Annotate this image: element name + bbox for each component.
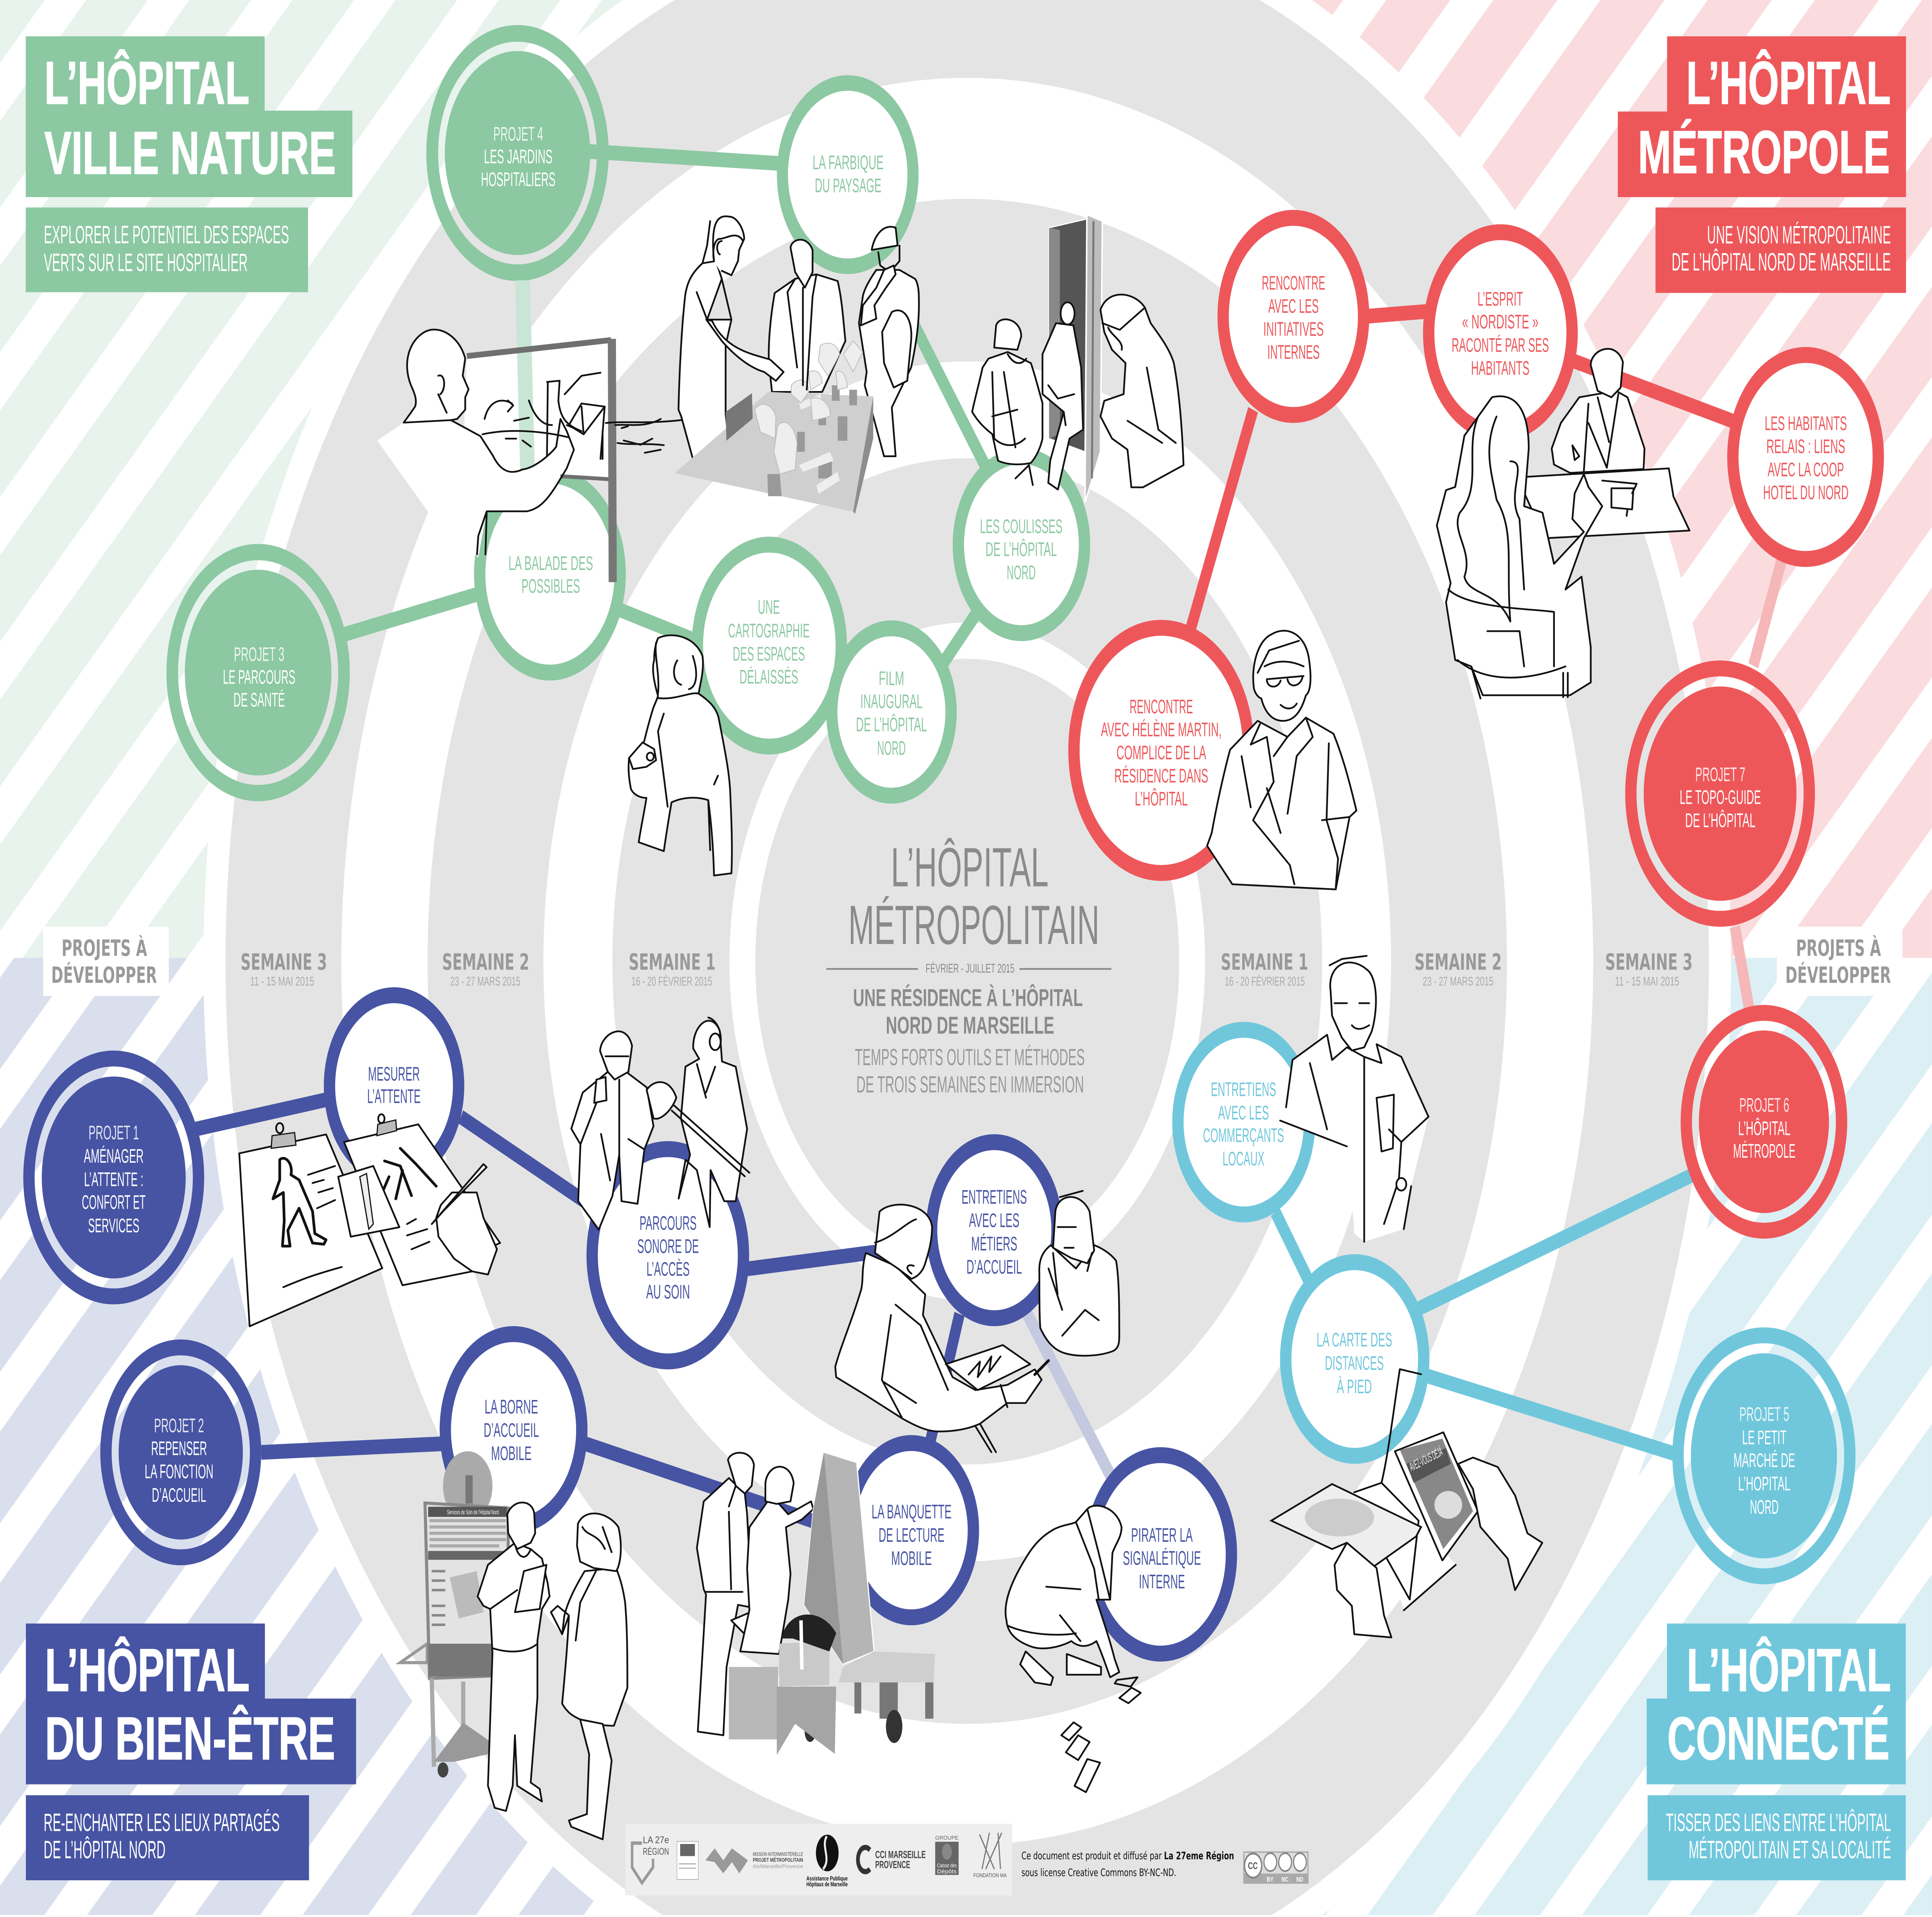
label: entretiens avec les metiers: ENTRETIENS [962, 1186, 1027, 1208]
project 1 circle: AMÉNAGER [84, 1145, 144, 1167]
project 3 circle: LE PARCOURS [223, 667, 295, 688]
project 3 circle: PROJET 3 [234, 644, 284, 665]
event: les habitants relais: HOTEL DU NORD [1763, 482, 1849, 503]
central title block: UNE RÉSIDENCE À L’HÔPITAL [853, 984, 1083, 1012]
event: la farbique du paysage: LA FARBIQUE [813, 152, 884, 174]
project 6 circle: L’HÔPITAL [1738, 1117, 1791, 1140]
event: rencontre initiatives internes: INITIATIVES [1263, 318, 1324, 340]
event: rencontre initiatives internes: RENCONTRE [1262, 272, 1325, 294]
label: projets a developper right: PROJETS À [1796, 935, 1881, 961]
event: rencontre avec helene martin: RENCONTRE [1129, 696, 1193, 718]
event: la banquette circle [849, 1443, 973, 1617]
creative commons badge [1243, 1851, 1308, 1884]
week labels: SEMAINE 2 [442, 949, 529, 975]
label: la banquette de lecture mobile: MOBILE [891, 1548, 932, 1569]
label: projets a developper right: DÉVELOPPER [1786, 962, 1891, 988]
event: film inaugural: NORD [877, 738, 906, 759]
event: les habitants relais: AVEC LA COOP [1768, 459, 1844, 481]
event: la balade des possibles: POSSIBLES [522, 575, 580, 597]
event: mesurer l'attente: L’ATTENTE [367, 1086, 421, 1107]
event: une cartographie: CARTOGRAPHIE [728, 620, 810, 642]
event: la carte des distances a pied: LA CARTE DES [1316, 1329, 1392, 1351]
label: parcours sonore: PARCOURS [639, 1212, 697, 1234]
logo: groupe caisse des dépôts: Dépôts [937, 1868, 957, 1875]
label: projets a developper left: DÉVELOPPER [51, 962, 157, 988]
week labels: 16 - 20 FÉVRIER 2015 [1225, 975, 1305, 988]
week labels: 23 - 27 MARS 2015 [450, 975, 520, 988]
event: les habitants relais: LES HABITANTS [1765, 413, 1847, 434]
title panel: l'hôpital du bien-être [26, 1624, 356, 1880]
logo: assistance publique: Assistance Publique [806, 1874, 848, 1882]
label: projets a developper left [43, 927, 169, 996]
illustration: man sketching on a transparent board [377, 280, 661, 582]
theme: l'hôpital ville nature (green) [172, 33, 1184, 876]
title panel: l'hôpital métropole [1618, 36, 1906, 293]
event: la borne d'accueil mobile: D’ACCUEIL [484, 1419, 539, 1441]
project 7 circle [1631, 668, 1809, 919]
blue connectors [196, 1100, 959, 1534]
project 1 circle: PROJET 1 [88, 1122, 139, 1144]
event: l'esprit nordiste: « NORDISTE » [1462, 311, 1539, 333]
event: les coulisses [958, 456, 1085, 633]
logo: groupe caisse des dépôts: GROUPE [935, 1835, 959, 1841]
label: entretiens avec les commerçants: LOCAUX [1223, 1148, 1264, 1170]
label: entretiens avec les commerçants [1203, 1078, 1284, 1170]
label: pirater la signaletique interne: PIRATER LA [1131, 1524, 1193, 1546]
event: la farbique du paysage [782, 83, 913, 266]
licence notice: sous license Creative Commons BY-NC-ND. [1021, 1867, 1176, 1879]
project 5 circle: L’HOPITAL [1738, 1473, 1791, 1495]
label: projets a developper right [1777, 927, 1902, 996]
central title block: TEMPS FORTS OUTILS ET MÉTHODES [855, 1044, 1085, 1070]
creative commons badge: NC [1281, 1876, 1289, 1883]
creative commons badge: BY [1267, 1876, 1274, 1883]
label: parcours sonore [637, 1212, 699, 1303]
week labels: 23 - 27 MARS 2015 [1423, 975, 1493, 988]
red connectors [1187, 311, 1735, 643]
title panel: l'hôpital ville nature [26, 36, 352, 292]
week labels: SEMAINE 1 [629, 949, 716, 975]
event: les habitants relais: RELAIS : LIENS [1766, 435, 1845, 458]
illustration: mobile reception kiosk with two people: Services de Soin de l’Hôpital Nord [447, 1509, 499, 1516]
week labels [241, 949, 1692, 988]
project 1 circle: SERVICES [88, 1215, 139, 1237]
logo: mission interministérielle: Aix/Marseille/Provence [753, 1864, 803, 1869]
event: les coulisses: NORD [1007, 562, 1036, 583]
illustration: shopkeeper portrait [1275, 956, 1429, 1242]
creative commons badge: ND [1296, 1876, 1303, 1883]
logo: assistance publique: Hôpitaux de Marseille [806, 1881, 848, 1888]
title panel: l'hôpital ville nature: L’HÔPITAL [44, 49, 250, 117]
logo: mission interministérielle: MISSION INTERMINISTÉRIELLE [753, 1851, 803, 1857]
label: entretiens avec les metiers [962, 1186, 1027, 1278]
project 1 circle: CONFORT ET [82, 1192, 146, 1213]
illustration: three visitors at a door [972, 214, 1184, 503]
label: entretiens avec les metiers: AVEC LES [969, 1210, 1019, 1232]
illustration: hands holding map and tablet: AVEZ-VOUS DÉJÀ [1408, 1444, 1444, 1474]
project 7 circle: LE TOPO-GUIDE [1680, 787, 1761, 808]
project 4 circle: LES JARDINS [484, 146, 553, 168]
project 3 circle: DE SANTÉ [233, 689, 285, 711]
event: la borne d'accueil mobile: LA BORNE [485, 1396, 538, 1418]
logo: cci marseille provence [858, 1847, 926, 1872]
event: les coulisses: LES COULISSES [980, 516, 1063, 538]
project 2 circle: REPENSER [151, 1437, 207, 1459]
event: mesurer l'attente: MESURER [368, 1063, 420, 1085]
event: l'esprit nordiste: RACONTÉ PAR SES [1452, 335, 1549, 356]
week labels: 16 - 20 FÉVRIER 2015 [631, 975, 712, 988]
title panel: l'hôpital du bien-être: L’HÔPITAL [45, 1636, 250, 1704]
week labels: SEMAINE 2 [1415, 949, 1502, 975]
project 2 circle: PROJET 2 [154, 1415, 204, 1437]
title panel: l'hôpital ville nature: EXPLORER LE POTENTIEL DES ESPACES [44, 221, 289, 249]
event: l'esprit nordiste: HABITANTS [1471, 357, 1529, 379]
event: la carte des distances a pied [1286, 1262, 1424, 1456]
logo: cci marseille provence: CCI MARSEILLE [875, 1849, 926, 1860]
project 5 circle: LE PETIT [1742, 1427, 1786, 1449]
central title block: FÉVRIER - JUILLET 2015 [925, 961, 1014, 975]
logo: mission interministérielle [706, 1848, 803, 1873]
central title block [826, 837, 1111, 1098]
project 4 circle: HOSPITALIERS [481, 169, 556, 191]
licence notice [1021, 1850, 1234, 1879]
event: film inaugural [832, 628, 951, 796]
label: pirater la signaletique interne: SIGNALÉTIQUE [1123, 1547, 1201, 1569]
label: pirater la signaletique interne [1123, 1524, 1201, 1593]
project 6 circle: MÉTROPOLE [1733, 1140, 1796, 1162]
illustration: portrait of Hélène Martin [1207, 631, 1356, 890]
logo: fondation: FONDATION MA [973, 1872, 1007, 1878]
label: entretiens avec les metiers: MÉTIERS [971, 1233, 1017, 1255]
week labels: 11 - 15 MAI 2015 [1615, 975, 1679, 988]
illustration: visitors at the reading bench [697, 1452, 935, 1755]
label: projets a developper left: PROJETS À [61, 935, 147, 961]
project 2 circle: LA FONCTION [145, 1461, 213, 1483]
project 5 circle: NORD [1750, 1496, 1779, 1518]
title panel: l'hôpital métropole: L’HÔPITAL [1686, 49, 1891, 117]
central title block: NORD DE MARSEILLE [886, 1012, 1054, 1039]
illustration: three men around the model table [606, 216, 919, 514]
label: entretiens avec les metiers: D’ACCUEIL [966, 1256, 1022, 1278]
central title block: L’HÔPITAL [891, 837, 1049, 898]
logo: cci marseille provence: PROVENCE [875, 1859, 910, 1870]
event: rencontre initiatives internes: AVEC LES [1268, 296, 1319, 317]
title panel: l'hôpital connecté: L’HÔPITAL [1687, 1636, 1891, 1704]
project 6 circle: PROJET 6 [1739, 1094, 1789, 1116]
project 5 circle: PROJET 5 [1739, 1403, 1789, 1425]
illustration: woman holding a camera [629, 635, 732, 876]
project 5 circle: MARCHÉ DE [1733, 1450, 1795, 1471]
event: une cartographie: UNE [758, 597, 780, 618]
week labels: SEMAINE 3 [1605, 949, 1692, 975]
label: pirater la signaletique interne: INTERNE [1139, 1571, 1185, 1593]
label: entretiens avec les commerçants: COMMERÇANTS [1203, 1124, 1284, 1146]
event: rencontre initiatives internes [1223, 218, 1364, 415]
logo: groupe caisse des dépôts [935, 1835, 959, 1875]
title panel: l'hôpital du bien-être: RE-ENCHANTER LES LIEUX PARTAGÉS [44, 1809, 280, 1837]
week labels: SEMAINE 3 [241, 949, 327, 975]
logo: préfecture [677, 1841, 698, 1880]
logo: fondation [973, 1833, 1007, 1878]
label: la banquette de lecture mobile: LA BANQUETTE [872, 1501, 952, 1523]
event: les coulisses: DE L’HÔPITAL [985, 538, 1057, 561]
event: pirater circle [1090, 1455, 1231, 1653]
illustration: crouching woman placing signs [1005, 1506, 1141, 1792]
logo: groupe caisse des dépôts: Caisse des [937, 1862, 957, 1869]
label: parcours sonore: AU SOIN [646, 1281, 690, 1303]
project 7 circle: PROJET 7 [1695, 764, 1745, 786]
title panel: l'hôpital métropole: MÉTROPOLE [1638, 118, 1890, 186]
event: une cartographie: DES ESPACES [733, 643, 805, 665]
event: rencontre initiatives internes: INTERNES [1267, 342, 1320, 363]
partner logos strip [625, 1824, 1308, 1895]
event: la farbique du paysage: DU PAYSAGE [815, 175, 881, 197]
event: rencontre avec helene martin: AVEC HÉLÈNE MARTIN, [1101, 719, 1222, 741]
central title block: MÉTROPOLITAIN [848, 894, 1099, 956]
licence notice: Ce document est produit et diffusé par La 27eme Région [1021, 1850, 1234, 1862]
event: film inaugural: INAUGURAL [861, 691, 923, 713]
event: parcours sonore circle [592, 1149, 743, 1361]
event: rencontre avec helene martin: RÉSIDENCE DANS [1114, 765, 1208, 787]
green connectors [344, 147, 986, 664]
week labels: 11 - 15 MAI 2015 [250, 975, 314, 988]
title panel: l'hôpital du bien-être: DU BIEN-ÊTRE [45, 1704, 335, 1772]
theme: l'hôpital connecté (cyan) [1178, 956, 1850, 1637]
logo: assistance publique [806, 1835, 848, 1888]
event: entretiens avec les metiers circle [932, 1142, 1057, 1318]
theme: l'hôpital du bien-être (blue) [29, 995, 1231, 1839]
illustration: mobile reception kiosk with two people [400, 1451, 628, 1839]
title panel: l'hôpital connecté: CONNECTÉ [1667, 1704, 1889, 1772]
project 5 circle [1678, 1335, 1850, 1576]
project 4 circle [432, 33, 603, 273]
event: film inaugural: DE L’HÔPITAL [856, 714, 927, 736]
creative commons badge: CC [1248, 1861, 1258, 1871]
event: la carte des distances a pied: À PIED [1337, 1376, 1372, 1398]
label: la banquette de lecture mobile: DE LECTURE [879, 1524, 944, 1546]
title panel: l'hôpital ville nature: VILLE NATURE [44, 119, 336, 187]
event: rencontre avec helene martin: L’HÔPITAL [1135, 788, 1188, 810]
project 7 circle: DE L’HÔPITAL [1685, 810, 1755, 832]
event: une cartographie: DÉLAISSÉS [740, 666, 798, 688]
event: la borne d'accueil mobile: MOBILE [491, 1443, 532, 1465]
concentric week rings [226, 0, 1709, 1917]
label: entretiens avec les commerçants: ENTRETIENS [1211, 1078, 1276, 1101]
event: une cartographie [697, 544, 841, 747]
illustration: woman taking notes and interviewee [835, 1191, 1119, 1452]
pale red connectors [1735, 560, 1782, 1012]
title panel: l'hôpital connecté [1646, 1624, 1906, 1880]
event: l'esprit nordiste [1429, 232, 1572, 434]
logo: la 27e région: RÉGION [643, 1846, 669, 1857]
title panel: l'hôpital du bien-être: DE L’HÔPITAL NORD [44, 1835, 165, 1864]
week labels: SEMAINE 1 [1221, 949, 1308, 975]
project 2 circle: D’ACCUEIL [152, 1485, 206, 1506]
event: entretiens avec les commerçants [1178, 1030, 1310, 1214]
theme: l'hôpital métropole (red) [1074, 218, 1878, 1454]
event: rencontre avec helene martin [1074, 628, 1249, 873]
project 6 circle [1686, 1013, 1842, 1231]
title panel: l'hôpital ville nature: VERTS SUR LE SITE HOSPITALIER [44, 249, 248, 277]
event: la borne d'accueil mobile [445, 1334, 582, 1526]
illustration: hands holding map and tablet [1271, 1369, 1542, 1637]
label: la banquette de lecture mobile [872, 1501, 952, 1569]
project 1 circle: L’ATTENTE : [84, 1169, 143, 1191]
event: la balade des possibles [480, 475, 620, 673]
logo: la 27e région: LA 27e [643, 1835, 669, 1846]
project 2 circle [106, 1347, 255, 1557]
pale blue connector [1025, 1310, 1110, 1475]
label: entretiens avec les commerçants: AVEC LES [1218, 1102, 1269, 1124]
project 4 circle: PROJET 4 [493, 123, 543, 145]
event: les habitants relais [1733, 355, 1878, 559]
illustration: clipboards with measuring figures [239, 1114, 500, 1326]
label: parcours sonore: L’ACCÈS [646, 1258, 690, 1280]
label: parcours sonore: SONORE DE [637, 1236, 699, 1257]
cyan connectors drawn under project 6 [1275, 1172, 1698, 1454]
logo: la 27e région [632, 1835, 669, 1883]
event: mesurer l'attente [330, 995, 459, 1176]
illustration: two women with a sound recorder [571, 1017, 749, 1230]
logo: mission interministérielle: PROJET MÉTROPOLITAIN [753, 1857, 803, 1863]
event: l'esprit nordiste: L’ESPRIT [1478, 288, 1523, 310]
central title block: DE TROIS SEMAINES EN IMMERSION [856, 1072, 1084, 1098]
event: rencontre avec helene martin: COMPLICE DE LA [1116, 742, 1206, 764]
event: film inaugural: FILM [879, 668, 904, 690]
event: la balade des possibles: LA BALADE DES [509, 553, 593, 574]
illustration: reception desk conversation [1437, 349, 1689, 698]
project 3 circle [172, 552, 344, 793]
project 1 circle [29, 1058, 199, 1296]
event: la carte des distances a pied: DISTANCES [1325, 1352, 1384, 1374]
